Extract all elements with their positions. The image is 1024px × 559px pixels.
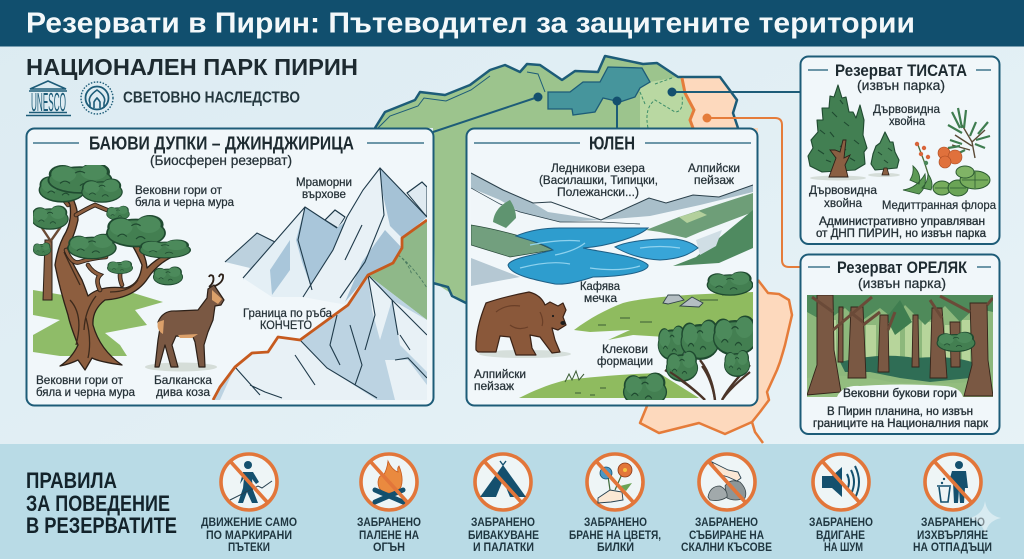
rule label: БИВАКУВАНЕ [468, 528, 539, 542]
rule label: ЗАБРАНЕНО [471, 515, 535, 529]
right slopes [646, 193, 753, 238]
label: glacial lakes: Полежански...) [557, 185, 639, 199]
map: park territory in green [375, 56, 694, 303]
label: Balkan chamois: Балканска [154, 373, 212, 387]
rule label: НА ШУМ [824, 540, 863, 554]
boundary line: Konchento ridge [213, 220, 427, 400]
label: marble peaks [296, 175, 352, 201]
label: juniper bottom [809, 183, 877, 210]
heading: national park: НАЦИОНАЛЕН ПАРК ПИРИН [26, 54, 358, 80]
note: administered by the park: Административно управляван [819, 214, 985, 228]
rule icon: no fire [361, 454, 417, 510]
label: ridge boundary: КОНЧЕТО [260, 318, 312, 332]
rule label: БРАНЕ НА ЦВЕТЯ, [569, 528, 661, 542]
left slopes [471, 225, 553, 257]
label: alpine landscape top: Алпийски [688, 161, 740, 175]
map: orange border [682, 78, 694, 128]
label: glacial lakes: (Василашки, Типицки, [539, 173, 658, 187]
label: brown bear: Кафява [580, 279, 620, 293]
green slope beyond the ridge [368, 220, 427, 320]
rule label: ДВИЖЕНИЕ САМО [201, 515, 297, 529]
map: inner park line [378, 72, 545, 128]
icon: world heritage emblem [81, 82, 113, 114]
icon: UNESCO logo [26, 81, 71, 117]
rule label: НА ОТПАДЪЦИ [913, 540, 992, 554]
marker: Yulen [612, 96, 622, 106]
label: glacial lakes: Ледникови езера [551, 161, 645, 175]
rule label [913, 515, 992, 554]
marker: Bayuvi Dupki [534, 92, 542, 102]
rule label: СЪБИРАНЕ НА [689, 528, 764, 542]
label: pine forests top [135, 183, 234, 209]
panel: Bayuvi Dupki - Dzhindzhiritsa [26, 128, 434, 406]
note: outside national park: В Пирин планина, но извън [827, 404, 973, 418]
label: Mediterranean flora: Медиттранная флора [882, 198, 996, 212]
rule label [468, 515, 539, 554]
label: alpine landscape bottom: Алпийски [474, 367, 526, 381]
map: dashed trails [640, 78, 682, 128]
connector: Yulen [616, 101, 618, 128]
rule icon: no camping [475, 454, 531, 510]
panel: rules band [0, 444, 1024, 559]
label: dwarf pine: Клекови [602, 342, 648, 356]
heading: rules: ПРАВИЛА [26, 468, 117, 493]
heading: rules: ЗА ПОВЕДЕНИЕ [26, 491, 170, 516]
label: beech forests: Вековни букови гори [843, 386, 957, 400]
rule label: ЗАБРАНЕНО [695, 515, 758, 529]
map: peach area outside the park [640, 77, 792, 434]
label: pine forests bottom: бяла и черна мура [36, 385, 135, 399]
label: alpine landscape bottom: пейзаж [474, 379, 515, 393]
text: world heritage: СВЕТОВНО НАСЛЕДСТВО [123, 90, 300, 106]
label: Balkan chamois [154, 373, 212, 399]
dwarf pine formations [623, 272, 757, 408]
rule label: ЗАБРАНЕНО [584, 515, 647, 529]
branches [60, 195, 122, 290]
heading: rules: В РЕЗЕРВАТИТЕ [26, 513, 177, 538]
label: marble peaks: върхове [302, 187, 346, 201]
map: peach coastline [640, 280, 792, 443]
rule label: ПАЛЕНЕ НА [359, 528, 419, 542]
note: administered by the park: от ДНП ПИРИН, но извън парка [816, 226, 986, 240]
label: juniper top [873, 102, 940, 128]
label: alpine landscape bottom [474, 367, 526, 393]
rule icon: no collecting rocks [699, 454, 755, 510]
illustration: brown bear [476, 292, 571, 358]
illustration: Mediterranean flora [903, 108, 990, 196]
label: brown bear [580, 279, 620, 305]
icon: sparkle watermark [969, 501, 1001, 535]
panel: Orelyak reserve [800, 254, 1000, 434]
subheading: biosphere reserve: (Биосферен резерват) [150, 153, 292, 168]
rule icon: no littering [925, 454, 981, 510]
label: pine forests top: бяла и черна мура [135, 195, 234, 209]
title: Резервати в Пирин: Пътеводител за защитените територии [26, 8, 915, 40]
illustration: beech forest [807, 295, 993, 397]
rule label: ЗАБРАНЕНО [357, 515, 421, 529]
rule label: ПО МАРКИРАНИ [206, 528, 292, 542]
foliage clusters [39, 163, 191, 285]
rule label: ИЗХВЪРЛЯНЕ [917, 528, 988, 542]
rule label [681, 515, 772, 554]
label: Balkan chamois: дива коза [156, 385, 210, 399]
panel: Yulen [466, 128, 758, 408]
illustration: mountains [213, 168, 427, 400]
marker: Tisata [668, 88, 676, 96]
map: west outline between panels [433, 283, 466, 303]
map of Pirin with park and reserves [375, 56, 800, 443]
illustration: glacial lakes landscape [471, 173, 757, 408]
map: Yulen zone in teal [548, 67, 650, 115]
label: pine forests top: Вековни гори от [135, 183, 222, 197]
label: marble peaks: Мраморни [296, 175, 352, 189]
back mountains [471, 173, 753, 232]
label: pine forests bottom: Вековни гори от [36, 373, 123, 387]
label: juniper top: хвойна [889, 114, 925, 128]
rule label: ОГЪН [373, 540, 405, 554]
connector: Tisata [672, 91, 800, 93]
meadow [574, 292, 753, 340]
map: lighter eastern zone [640, 77, 694, 128]
label: dwarf pine: формации [597, 354, 653, 368]
label: ridge boundary [243, 306, 332, 332]
lake: small [615, 239, 698, 260]
note: outside national park [813, 404, 989, 430]
connector: Bayuvi Dupki [433, 97, 538, 132]
note: outside national park: границите на Националния парк [813, 416, 989, 430]
label: alpine landscape top [688, 161, 740, 187]
rule label: ПЪТЕКИ [228, 540, 270, 554]
rule label: СКАЛНИ КЪСОВЕ [681, 540, 772, 554]
white label cloud [837, 384, 963, 397]
label: juniper bottom: хвойна [824, 196, 862, 210]
label: juniper bottom: Дървовидна [809, 183, 877, 197]
subheading: outside park: (извън парка) [857, 78, 945, 93]
label: pine forests bottom [36, 373, 135, 399]
marker: Orelyak [702, 114, 712, 122]
rule icon: no picking flowers [587, 454, 643, 510]
heading: Orelyak: Резерват ОРЕЛЯК [837, 259, 968, 277]
rule icon: no noise [813, 454, 869, 510]
subheading: outside park: (извън парка) [858, 276, 946, 291]
header bar [0, 0, 1024, 46]
rule label [201, 515, 297, 554]
heading: Yulen: ЮЛЕН [589, 132, 635, 154]
illustration: juniper trees [808, 85, 900, 180]
illustration: ancient pine tree [31, 163, 191, 370]
rule label [809, 515, 873, 554]
rule label: И ПАЛАТКИ [473, 540, 534, 554]
connector: Orelyak [707, 118, 800, 267]
illustration: Balkan chamois [145, 274, 224, 372]
rule icon: marked trails only [221, 454, 277, 510]
label: alpine landscape top: пейзаж [694, 173, 735, 187]
rule label: ВДИГАНЕ [816, 528, 865, 542]
heading: Tisata: Резерват ТИСАТА [835, 62, 967, 80]
label: juniper top: Дървовидна [873, 102, 940, 116]
heading: rules [26, 468, 177, 538]
label: ridge boundary: Граница по ръба [243, 306, 332, 320]
heading: Bayuvi Dupki: БАЮВИ ДУПКИ – ДЖИНДЖИРИЦА [89, 132, 354, 154]
rule label [357, 515, 421, 554]
rule label [569, 515, 661, 554]
rule label: ЗАБРАНЕНО [921, 515, 985, 529]
note: administered by the park [816, 214, 986, 240]
lake: main [508, 228, 648, 284]
rule label: БИЛКИ [597, 540, 634, 554]
label: glacial lakes [539, 161, 658, 199]
rule label: ЗАБРАНЕНО [809, 515, 873, 529]
rocks [663, 295, 703, 307]
label: dwarf pine [597, 342, 653, 368]
label: brown bear: мечка [584, 291, 617, 305]
panel: Tisata reserve [800, 56, 1000, 244]
map: north outline [375, 56, 738, 128]
text: UNESCO [31, 87, 66, 117]
